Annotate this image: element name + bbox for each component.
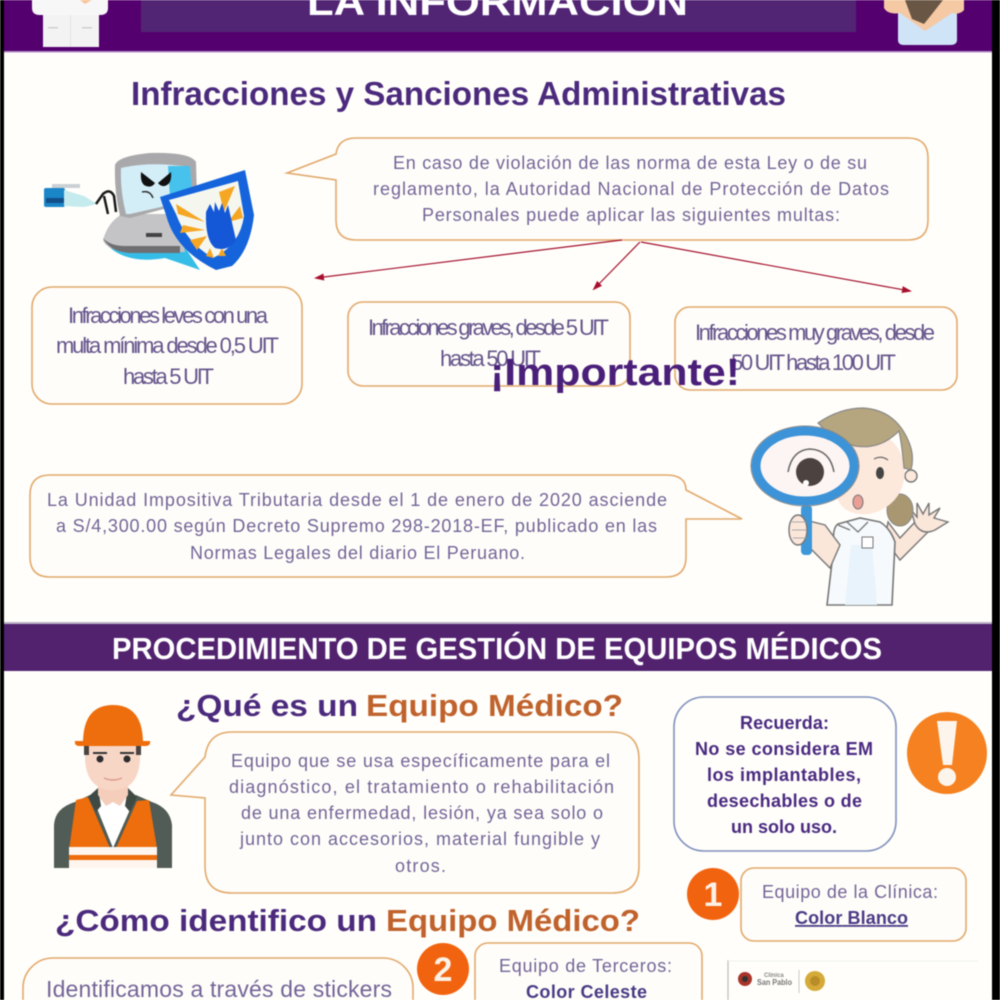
heading: qué es un equipo médico: ¿Qué es un <box>176 688 358 723</box>
box: infracciones leves: multa mínima desde 0,5 UIT <box>56 333 279 358</box>
icon: patient <box>884 0 964 45</box>
text: UIT: La Unidad Impositiva Tributaria desde el 1 de enero de 2020 asciende <box>47 490 667 510</box>
callout: recuerda: desechables o de <box>707 791 862 811</box>
box: infracciones leves: Infracciones leves con una <box>68 303 269 328</box>
text: UIT: Normas Legales del diario El Peruano. <box>190 543 525 563</box>
box: infracciones leves <box>32 287 302 404</box>
heading: cómo identifico: ¿Cómo identifico un <box>55 903 377 938</box>
box: infracciones muy graves: 50 UIT hasta 100 UIT <box>731 350 896 375</box>
bubble: UIT <box>30 475 742 577</box>
logo card: San Pablo <box>757 978 792 987</box>
text: definición: otros. <box>395 856 446 876</box>
heading: cómo identifico: Equipo Médico? <box>386 903 640 938</box>
icon: laptop with shield <box>44 153 254 270</box>
icon: doctor <box>32 0 108 47</box>
text: multas intro <box>373 153 889 225</box>
badge: 2 <box>417 943 469 995</box>
badge: 1 <box>687 868 739 920</box>
box: equipo de la clínica: Equipo de la Clínica: <box>762 882 938 902</box>
box: infracciones leves: hasta 5 UIT <box>123 364 214 389</box>
text: definición: Equipo que se usa específicamente para el <box>231 751 610 771</box>
box: identificamos <box>23 958 413 1000</box>
box: infracciones graves: hasta 50 UIT <box>440 346 541 371</box>
header band <box>0 0 1000 52</box>
text: multas intro: En caso de violación de las norma de esta Ley o de su <box>393 153 867 173</box>
text: definición: junto con accesorios, material fungible y <box>239 829 600 849</box>
box: infracciones graves: Infracciones graves, desde 5 UIT <box>368 315 609 340</box>
box: equipo de terceros: Equipo de Terceros: <box>499 956 672 976</box>
callout: recuerda <box>674 697 896 851</box>
icon: worker <box>54 705 172 868</box>
text: definición <box>229 751 614 876</box>
badge: 1: 1 <box>704 876 722 914</box>
icon: nurse with magnifying glass <box>751 408 948 605</box>
band: procedimiento <box>0 622 1000 671</box>
text: multas intro: Personales puede aplicar las siguientes multas: <box>422 205 840 225</box>
text: definición: de una enfermedad, lesión, ya sea solo o <box>241 803 603 823</box>
box: infracciones graves <box>348 302 630 386</box>
text: UIT <box>47 490 667 563</box>
heading: infracciones: Infracciones y Sanciones Administrativas <box>131 75 786 112</box>
icon: exclamation <box>907 712 987 794</box>
callout: recuerda: un solo uso. <box>731 817 837 837</box>
heading: qué es un equipo médico <box>176 688 623 723</box>
box: equipo de la clínica: Color Blanco <box>795 908 908 928</box>
heading: qué es un equipo médico: Equipo Médico? <box>366 688 623 723</box>
heading: cómo identifico <box>55 903 640 938</box>
box: equipo de terceros <box>475 943 702 1000</box>
badge: 2: 2 <box>434 951 452 989</box>
logo card <box>728 960 978 1000</box>
callout: recuerda: los implantables, <box>707 765 861 785</box>
text: UIT: a S/4,300.00 según Decreto Supremo 298-2018-EF, publicado en las <box>56 516 657 536</box>
band title: PROCEDIMIENTO DE GESTIÓN DE EQUIPOS MÉDICOS <box>112 630 882 666</box>
heading: importante: ¡Importante! <box>490 352 740 394</box>
bubble: violación de la norma <box>287 138 928 240</box>
logo card: Clínica <box>764 973 784 979</box>
box: infracciones muy graves <box>675 307 957 390</box>
box: equipo de la clínica <box>741 868 966 941</box>
bubble: definición equipo médico <box>171 732 639 893</box>
arrows to sanctions <box>316 240 910 291</box>
text: multas intro: reglamento, la Autoridad Nacional de Protección de Datos <box>373 179 889 199</box>
text: definición: diagnóstico, el tratamiento o rehabilitación <box>229 777 614 797</box>
callout: recuerda: No se considera EM <box>695 739 873 759</box>
callout: recuerda: Recuerda: <box>740 713 829 733</box>
box: infracciones muy graves: Infracciones muy graves, desde <box>695 320 935 345</box>
